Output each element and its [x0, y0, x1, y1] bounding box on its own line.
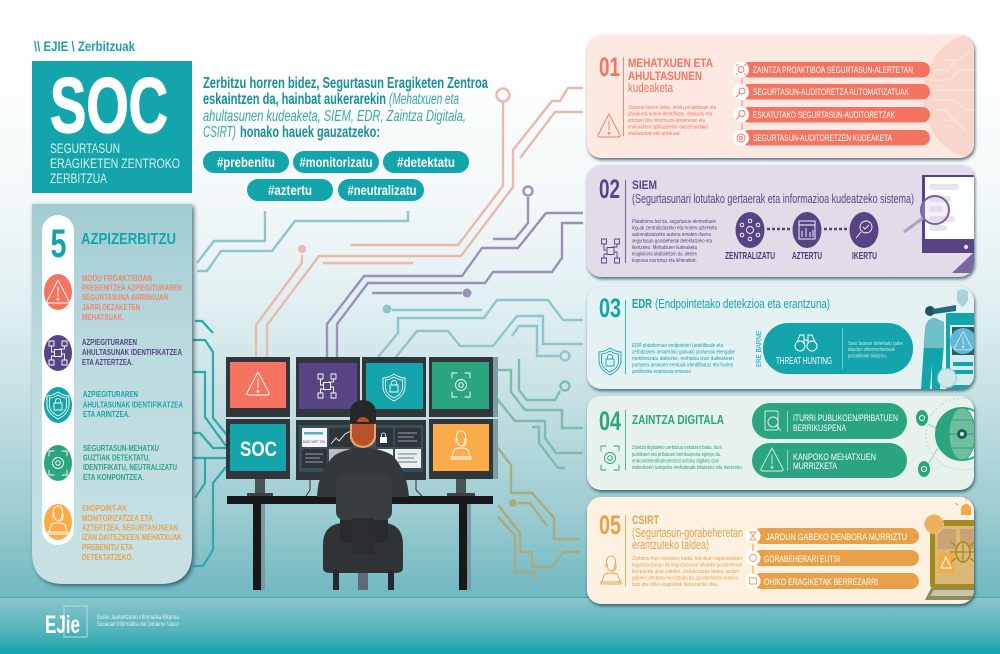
- text: vulnerabilities: [82, 338, 182, 367]
- hashtag pills: #aztertu: [268, 182, 312, 198]
- text: endpoints: IZAN DAITEZKEEN MEHATXUAK: [82, 533, 182, 542]
- desk: [227, 479, 493, 590]
- heading: CSIRT: [632, 513, 660, 527]
- person: [317, 400, 409, 590]
- circuit traces: lavender: [327, 186, 583, 357]
- action list: GORABEHERARI EUTSI: [764, 554, 840, 565]
- process steps: ZENTRALIZATU: [725, 251, 775, 262]
- text: detect: SEGURTASUN-MEHATXU: [83, 444, 159, 453]
- description: Plataforma bat da, segurtasun-elementuen: [632, 219, 716, 225]
- description: zerbitzarien amaierako gailuak) jarduerak etengabe: [632, 350, 735, 356]
- monitor: circuit: [296, 357, 360, 417]
- description: erakunde/entitatearentzat arrisku digitala izan: [632, 458, 719, 464]
- illustration: analyst at monitors: [226, 357, 498, 590]
- footer band: [0, 597, 1000, 654]
- circuit traces: light teal: [197, 211, 583, 360]
- description: ahalik eta arinen identifikatu, ebaluatu eta: [628, 112, 712, 118]
- circuit traces: pink: [256, 88, 583, 357]
- text: vulnerabilities: ETA AZTERTZEA.: [82, 358, 133, 367]
- description: kopurua murriztuz eta lehenetsiz.: [632, 258, 697, 264]
- threat hunting pill: dauden zibermehatxuak: [848, 347, 895, 353]
- description: gelditzeko erantzuna emanez.: [632, 369, 692, 375]
- subtitle: ZERBITZUA: [50, 171, 107, 186]
- number 03: 03: [599, 293, 621, 323]
- pill: sources review: BERRIKUSPENA: [793, 423, 846, 434]
- process steps: IKERTU: [852, 251, 877, 262]
- hashtag pills: #monitorizatu: [300, 154, 372, 170]
- icon: person: [601, 556, 621, 584]
- text: proactive: JARRI DEZAKETEN: [82, 303, 140, 312]
- description: Zerbitzu hori eskatzen bada, teknikari espezialisten: [632, 556, 742, 562]
- text: mitigate: AHULTASUNAK IDENTIFIKATZEA: [83, 400, 183, 410]
- text: vulnerabilities: AHULTASUNAK IDENTIFIKATZEA: [82, 348, 182, 357]
- illustration: laptop with bug: [924, 498, 980, 600]
- intro text: (Mehatxuen eta: [389, 91, 459, 108]
- text: endpoints: MONITORIZATZEA ETA: [82, 514, 153, 523]
- description: arintzen dira informazio-sistemetan eta: [628, 118, 705, 124]
- description: segurtasun-gorabeherak detektatzeko eta: [632, 238, 712, 244]
- text: endpoints: PREBENITU ETA: [82, 543, 133, 552]
- intro text: ahultasunen kudeaketa, SIEM, EDR, Zaintza Digitala,: [203, 108, 466, 125]
- text: detect: [83, 444, 177, 482]
- circuit traces: green: [494, 359, 583, 468]
- description: portaera arraroen ereduak identifikatuz eta horiek: [632, 362, 733, 368]
- description: log-ak zentralizatzeko eta horien azterketa: [632, 226, 717, 232]
- description: [632, 343, 735, 375]
- illustration: monitor with magnifier: [904, 175, 977, 273]
- pill: external threats: [752, 443, 907, 478]
- intro text: honako hauek gauzatzeko:: [240, 124, 380, 141]
- hashtag pills: #prebenitu: [217, 154, 275, 170]
- heading: [628, 56, 713, 95]
- number 02: 02: [599, 174, 620, 204]
- title: SOC: SOC: [50, 61, 168, 149]
- monitor: SOC: SOC: [240, 438, 277, 461]
- footer caption: [97, 615, 179, 628]
- pill: sources review: ITURRI PUBLIKOEN/PRIBATUEN: [793, 413, 898, 424]
- number 5: 5: [50, 222, 66, 266]
- panel: 03 EDR: [587, 287, 976, 389]
- illustration: globe: [916, 398, 974, 477]
- text: proactive: SEGURTASUNA ARRISKUAN: [82, 293, 168, 302]
- description: EDR plataforman endpointen (arabiltzaile eta: [632, 343, 723, 349]
- subtitle: [50, 141, 180, 186]
- panel: 04 digital surveillance: [587, 396, 998, 490]
- heading: SIEM: [632, 178, 657, 192]
- icon: eye: [44, 445, 72, 481]
- heading: ZAINTZA DIGITALA: [632, 412, 724, 427]
- monitor: SOC: [226, 419, 290, 479]
- description: monitorizatu daitezke, mehatxu izan daitezkeen: [632, 356, 734, 362]
- heading: MEHATXUEN ETA: [628, 56, 713, 70]
- threat hunting pill: proaktiboki bilatzea.: [848, 354, 887, 360]
- panel: 01 threats and vulnerabilities: [587, 34, 1000, 158]
- feature list: ZAINTZA PROAKTIBOA SEGURTASUN-ALERTETAN: [753, 65, 913, 75]
- subheading: [632, 526, 743, 552]
- heading: azpizerbitzu: AZPIZERBITZU: [81, 231, 176, 248]
- subtitle: ERAGIKETEN ZENTROKO: [50, 156, 180, 171]
- monitor: person: [429, 419, 498, 479]
- description: [628, 105, 716, 137]
- panel: SOC title block: [32, 61, 192, 193]
- text: detect: IDENTIFIKATU, NEUTRALIZATU: [83, 463, 177, 472]
- icon: circuit: [44, 335, 72, 371]
- heading: AHULTASUNEN: [628, 69, 702, 83]
- feature list: SEGURTASUN-AUDITORETZEN KUDEAKETA: [753, 133, 892, 143]
- icon: person: [44, 504, 72, 540]
- monitor: dashboard: DATA THEFT 70%: [303, 440, 325, 444]
- subheading: (Segurtasun-gorabeheretan: [632, 526, 743, 540]
- feature list: ESKATUTAKO SEGURTASUN-AUDITORETZAK: [753, 110, 895, 120]
- circuit traces: dark teal left: [193, 321, 227, 566]
- process steps: AZTERTU: [792, 251, 822, 262]
- action list: OHIKO ERAGIKETAK BERREZARRI: [764, 577, 878, 588]
- decorative circuit head: [923, 36, 974, 157]
- pill: sources review: [752, 403, 907, 439]
- pill: external threats: KANPOKO MEHATXUEN: [793, 452, 876, 463]
- footer caption: Eusko Jaurlaritzaren Informatika Elkartea: [97, 615, 179, 621]
- icon: eye: [601, 446, 619, 470]
- threat hunting pill: THREAT HUNTING: [776, 356, 832, 367]
- description: [632, 219, 717, 264]
- footer caption: Sociedad Informática del Gobierno Vasco: [97, 622, 179, 628]
- description: ahultasunak edo arriskuak.: [628, 131, 681, 137]
- pill: external threats: MURRIZKETA: [793, 461, 837, 472]
- number 01: 01: [599, 52, 620, 82]
- icon: warning: [598, 114, 620, 137]
- description: eraginkorra ahalbidetzen du, alerten: [632, 252, 697, 258]
- action list: [746, 528, 919, 589]
- number 05: 05: [599, 510, 621, 540]
- description: laguntza izango da segurtasunari lotutako gorabeherak: [632, 562, 742, 568]
- description: automatizatzeko aukera ematen duena: [632, 232, 711, 238]
- intro text: [203, 75, 488, 141]
- text: endpoints: ENDPOINT-AK: [82, 504, 127, 513]
- monitor: shield: [362, 357, 426, 417]
- icon: warning: [44, 274, 72, 310]
- logo: Ejie: EJie: [45, 611, 80, 639]
- text: mitigate: [83, 390, 183, 419]
- intro text: CSIRT): [203, 124, 236, 141]
- heading: EDR: [632, 296, 652, 311]
- description: publikoen eta pribatuen berrikuspena egingo da,: [632, 452, 721, 458]
- text: proactive: MODU PROAKTIBOAN: [82, 274, 152, 283]
- text: endpoints: DETEKTATZEKO.: [82, 553, 133, 562]
- action list: JARDUN GABEKO DENBORA MURRIZTU: [766, 532, 907, 543]
- description: Sistema horren bidez, modu proaktiboan eta: [628, 105, 716, 111]
- description: gabeko denbora murriztuko da, gorabeherari eutsiko: [632, 576, 738, 582]
- description: ikertzeko. Mehatxuen kudeaketa: [632, 245, 697, 251]
- text: proactive: PREBENITZEA AZPIEGITURAREN: [82, 284, 182, 292]
- monitor: dashboard: [296, 420, 426, 480]
- breadcrumb heading: \\ EJIE \ Zerbitzuak: [34, 38, 135, 54]
- number 04: 04: [599, 406, 621, 436]
- text: vulnerabilities: AZPIEGITURAREN: [82, 338, 137, 347]
- panel: 05 CSIRT: [587, 497, 980, 604]
- description: erakundeen aplikazioetan antzemandako: [628, 124, 708, 130]
- label: ere barne: ERE BARNE: [756, 331, 763, 367]
- text: proactive: MEHATXUAK.: [82, 313, 124, 322]
- hashtag pills: [203, 151, 469, 201]
- feature list: [733, 62, 930, 146]
- description: Zaintza digitaleko zerbitzua eskatzen bada, iturri: [632, 445, 722, 451]
- description: [632, 556, 742, 588]
- description: zaio eta ohiko eragiketak berrezarriko dira.: [632, 582, 718, 588]
- description: [632, 445, 743, 471]
- text: endpoints: AZTERTZEA, SEGURTASUNEAN: [82, 524, 178, 532]
- subheading: erantzuteko taldea): [632, 538, 709, 552]
- process steps: [725, 212, 878, 262]
- icon: shield: [44, 387, 72, 423]
- panel: 02 SIEM: [587, 165, 977, 277]
- threat hunting pill: [763, 323, 913, 374]
- text: mitigate: ETA ARINTZEA.: [83, 410, 130, 419]
- subtitle: SEGURTASUN: [50, 141, 120, 156]
- icon: circuit: [602, 239, 620, 263]
- description: konpondu ahal izateko. Zerbitzuaren bidez, jardun: [632, 569, 739, 575]
- description: daitezkeen kanpoko mehatxuak bilatzeko eta ikertzeko.: [632, 465, 743, 471]
- subheading: (Endpointetako detekzioa eta erantzuna): [655, 296, 830, 311]
- hashtag pills: #detektatu: [397, 154, 455, 170]
- illustration: analyst and device: [921, 289, 976, 389]
- text: mitigate: AZPIEGITURAREN: [83, 390, 138, 399]
- text: proactive: [82, 274, 182, 322]
- hashtag pills: #neutralizatu: [348, 182, 416, 198]
- panel: 5 azpizerbitzu: [32, 204, 192, 584]
- text: detect: GUZTIAK DETEKTATU,: [83, 454, 150, 462]
- monitor: eye: [429, 357, 498, 417]
- text: endpoints: [82, 504, 182, 562]
- circuit traces: olive: [494, 443, 580, 580]
- monitor: warning: [226, 357, 290, 417]
- intro text: eskaintzen da, hainbat aukerarekin: [203, 91, 386, 108]
- icon: shield: [599, 348, 621, 375]
- feature list: SEGURTASUN-AUDITORETZA AUTOMATIZATUAK: [753, 87, 909, 97]
- heading: kudeaketa: [628, 80, 674, 95]
- intro text: Zerbitzu horren bidez, Segurtasun Eragiketen Zentroa: [203, 75, 488, 92]
- threat hunting pill: Sare batean detektatu gabe: [848, 341, 903, 347]
- text: detect: ETA KONPONTZEA.: [83, 473, 144, 482]
